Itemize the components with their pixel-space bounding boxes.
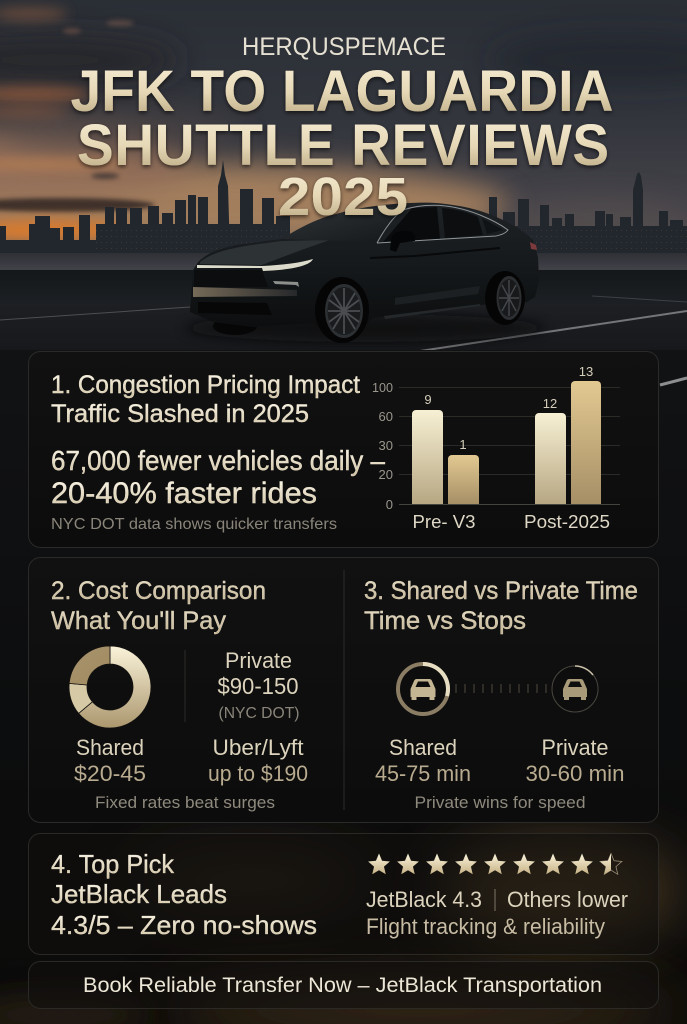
y axis labels	[372, 380, 393, 512]
front fascia dark	[194, 270, 268, 287]
private price: Private	[225, 648, 292, 673]
private price: $90-150	[218, 673, 298, 699]
heading 2: 2. Cost Comparison	[51, 577, 266, 605]
icon: private car ring	[552, 666, 598, 712]
title: 2025	[278, 166, 408, 227]
bar values: 9	[424, 392, 432, 407]
skyline right	[489, 172, 687, 256]
hero photo: city skyline at dusk with car	[0, 0, 687, 352]
panel 4: top pick	[28, 834, 658, 954]
title: SHUTTLE REVIEWS	[77, 114, 609, 178]
header: brand name: HERQUSPEMACE	[242, 33, 446, 61]
road	[0, 306, 687, 343]
call to action text: Book Reliable Transfer Now – JetBlack Transportation	[83, 973, 602, 997]
shared price: Shared	[76, 735, 144, 760]
title: JFK TO LAGUARDIA	[70, 60, 614, 124]
category labels: Post-2025	[524, 512, 610, 532]
windshield	[282, 208, 374, 240]
sea wall	[0, 270, 687, 306]
rear wheel	[485, 271, 525, 325]
category labels	[412, 512, 610, 532]
mirror	[390, 240, 416, 252]
time note: Private wins for speed	[414, 794, 586, 812]
private time: Private	[542, 735, 608, 760]
star rating	[368, 854, 622, 874]
uber lyft price: Uber/Lyft	[212, 735, 304, 760]
car windows	[383, 207, 440, 242]
bars	[412, 381, 601, 504]
car	[185, 203, 545, 343]
rating comparison: Others lower	[507, 887, 628, 912]
bar values: 1	[459, 437, 467, 452]
bar values	[424, 364, 593, 452]
sunset clouds	[0, 7, 687, 247]
panel 1: congestion pricing impact	[28, 352, 658, 548]
bar chart	[372, 364, 620, 532]
heading 4: 4.3/5 – Zero no-shows	[51, 910, 317, 940]
heading 2	[51, 577, 266, 635]
key statistic: 20-40% faster rides	[51, 477, 317, 510]
heading 2: What You'll Pay	[51, 607, 227, 635]
car body	[190, 202, 538, 326]
panel 2 and 3 container	[28, 558, 658, 822]
heading 3	[364, 577, 638, 635]
y axis labels: 20	[379, 467, 393, 482]
private time: 30-60 min	[526, 761, 624, 786]
heading 4: JetBlack Leads	[51, 879, 227, 909]
key statistic: 67,000 fewer vehicles daily –	[51, 445, 385, 476]
skyline windows	[96, 230, 687, 249]
heading 4	[51, 849, 317, 940]
headlight strip	[197, 259, 313, 271]
bar values: 13	[579, 364, 593, 379]
skyline left	[0, 160, 290, 254]
private price	[218, 648, 300, 722]
rating comparison: JetBlack 4.3	[366, 887, 482, 912]
y axis labels: 100	[372, 380, 393, 395]
private time	[526, 735, 624, 786]
front left tyre	[213, 322, 256, 335]
shared time	[375, 735, 471, 786]
tail light	[530, 242, 537, 250]
heading 4: 4. Top Pick	[51, 849, 175, 879]
shared time: Shared	[389, 735, 457, 760]
source note: NYC DOT data shows quicker transfers	[51, 516, 337, 533]
title	[70, 60, 614, 227]
background: mountains at the bottom	[0, 378, 687, 1024]
shared price	[74, 735, 146, 786]
shared time: 45-75 min	[375, 761, 471, 786]
shared price: $20-45	[74, 761, 146, 786]
lower bumper bar	[193, 287, 297, 297]
sky	[0, 0, 687, 260]
section 2: cost comparison	[51, 577, 308, 812]
heading 1: 1. Congestion Pricing Impact	[51, 371, 360, 399]
heading 3: 3. Shared vs Private Time	[364, 577, 638, 605]
call to action bar	[28, 962, 658, 1008]
uber lyft price: up to $190	[208, 761, 308, 786]
heading 1: Traffic Slashed in 2025	[51, 400, 309, 428]
y axis labels: 30	[379, 438, 393, 453]
fog light	[273, 281, 299, 287]
window trim	[377, 205, 508, 243]
private price: (NYC DOT)	[218, 705, 300, 722]
bar values: 12	[543, 396, 557, 411]
road lines	[0, 296, 687, 351]
category labels: Pre- V3	[412, 512, 476, 532]
cost note: Fixed rates beat surges	[95, 794, 275, 812]
door highlights	[395, 286, 480, 305]
key statistic	[51, 445, 385, 510]
water	[0, 253, 687, 271]
heading 1	[51, 371, 360, 428]
timeline ticks	[456, 684, 546, 693]
y axis labels: 0	[386, 497, 393, 512]
y axis labels: 60	[379, 409, 393, 424]
rating comparison	[366, 887, 628, 912]
donut chart	[69, 646, 151, 728]
heading 3: Time vs Stops	[364, 607, 526, 635]
hood highlight	[200, 240, 330, 265]
features line: Flight tracking & reliability	[366, 914, 605, 939]
section 3: time comparison	[364, 577, 638, 812]
icon: shared car ring	[398, 664, 448, 714]
grille	[198, 302, 272, 315]
uber lyft price	[208, 735, 308, 786]
front wheel	[315, 277, 369, 343]
